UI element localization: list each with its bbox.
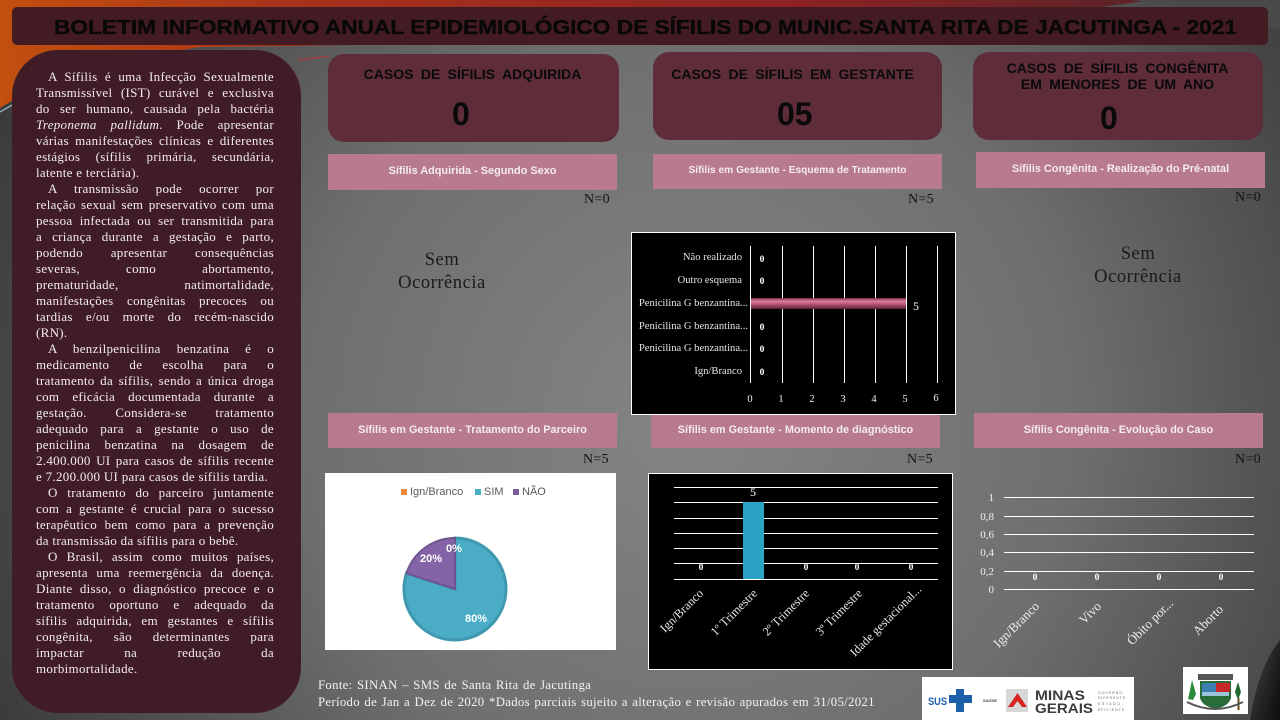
icon: municipal coat of arms: [1183, 667, 1248, 714]
line chart: evolução do caso: 0: [1219, 573, 1224, 583]
text block: syphilis description: O Brasil, assim como muitos países,: [48, 549, 274, 564]
column chart: momento de diagnóstico: 0: [699, 563, 704, 573]
sample size label: N=0: [1235, 190, 1261, 205]
sample size label: N=5: [583, 452, 609, 467]
bar chart: esquema de tratamento: 6: [933, 393, 939, 404]
bar chart: esquema de tratamento: 0: [760, 368, 765, 378]
title: BOLETIM INFORMATIVO ANUAL EPIDEMIOLÓGICO DE SÍFILIS DO MUNIC.SANTA RITA DE JACUTINGA - 2021: [54, 15, 1237, 39]
heading: adquirida segundo sexo: [328, 154, 617, 190]
line chart: evolução do caso: 0,6: [980, 529, 994, 541]
text block: syphilis description: Treponema pallidum. Pode apresentar: [36, 117, 274, 132]
no occurrence note right: Sem: [1121, 244, 1155, 264]
text block: syphilis description: A transmissão pode ocorrer por: [48, 181, 274, 196]
text block: syphilis description: morbimortalidade.: [36, 661, 138, 676]
legend: Ign/Branco: [410, 486, 463, 498]
line chart: evolução do caso: 0: [1033, 573, 1038, 583]
text block: syphilis description: O tratamento do parceiro juntamente: [48, 485, 274, 500]
card: casos de sífilis congênita: EM MENORES DE UM ANO: [1021, 76, 1214, 92]
line chart: evolução do caso: Ign/Branco: [990, 599, 1042, 650]
source note: [318, 678, 875, 709]
text block: syphilis description: tratamento oportuno e adequado da: [36, 597, 274, 612]
pie chart: tratamento do parceiro: 20%: [420, 553, 442, 565]
text block: syphilis description: manifestações congênitas precoces ou: [36, 293, 274, 308]
panel: text about syphilis: [12, 50, 301, 713]
line chart: evolução do caso: 0,4: [980, 547, 994, 559]
line chart: evolução do caso: Aborto: [1189, 602, 1226, 638]
text block: syphilis description: A benzilpenicilina benzatina é o: [48, 341, 274, 356]
bar chart: esquema de tratamento: 4: [871, 394, 877, 405]
column chart: momento de diagnóstico: 0: [909, 563, 914, 573]
column chart: momento de diagnóstico: 2º Trimestre: [760, 586, 813, 639]
card: casos de sífilis congênita: CASOS DE SÍFILIS CONGÊNITA: [1007, 60, 1228, 76]
line chart: evolução do caso: 0: [1095, 573, 1100, 583]
text block: syphilis description: A Sífilis é uma Infecção Sexualmente: [48, 69, 274, 84]
column chart: momento de diagnóstico: Idade gestacional...: [847, 582, 924, 659]
text block: syphilis description: pessoa infectada ou ser transmitida para: [36, 213, 274, 228]
bar chart: esquema de tratamento: 1: [778, 394, 784, 405]
bar chart: esquema de tratamento: 0: [760, 323, 765, 333]
column chart: momento de diagnóstico: [648, 473, 953, 670]
line chart: evolução do caso: 1: [988, 492, 994, 504]
heading: esquema de tratamento: [653, 154, 942, 189]
text block: syphilis description: com a gestante é crucial para o sucesso: [36, 501, 274, 516]
logo: SUS and Minas Gerais: GERAIS: [1035, 700, 1093, 716]
card: casos de sífilis adquirida: 0: [452, 96, 470, 132]
line chart: evolução do caso: Óbito por...: [1124, 596, 1176, 648]
legend: NÃO: [522, 485, 546, 498]
text block: syphilis description: severas, como abortamento,: [36, 261, 274, 276]
line chart: evolução do caso: [980, 492, 1254, 650]
slice: NÃO 20%: [406, 538, 455, 589]
text block: syphilis description: (RN).: [36, 325, 67, 340]
heading: esquema de tratamento: Sífilis em Gestante - Esquema de Tratamento: [689, 165, 906, 176]
sample size label: N=5: [907, 452, 933, 467]
text block: syphilis description: [36, 69, 274, 676]
bar chart: esquema de tratamento: [631, 232, 956, 415]
text block: syphilis description: penicilina benzatina na dosagem de: [36, 437, 274, 452]
column chart: momento de diagnóstico: 0: [855, 563, 860, 573]
legend: SIM: [484, 486, 504, 498]
logo: SUS and Minas Gerais: MINAS: [1035, 687, 1085, 703]
text block: syphilis description: prematuridade, natimortalidade,: [36, 277, 274, 292]
text block: syphilis description: tratamento da sífilis, sendo a única droga: [36, 373, 274, 388]
slice: SIM 80%: [404, 538, 506, 640]
logo: SUS and Minas Gerais: SUS: [928, 696, 947, 708]
sample size label: N=5: [908, 192, 934, 207]
text block: syphilis description: medicamento de escolha para o: [36, 357, 274, 372]
text block: syphilis description: relação sexual sem preservativo com uma: [36, 197, 274, 212]
text block: syphilis description: estágios (sífilis primária, secundária,: [36, 149, 274, 164]
heading: adquirida segundo sexo: Sífilis Adquirida - Segundo Sexo: [389, 165, 556, 177]
bar chart: esquema de tratamento: Penicilina G benzantina...: [639, 343, 748, 354]
column chart: momento de diagnóstico: Ign/Branco: [657, 586, 706, 635]
text block: syphilis description: congênita, são determinantes para: [36, 629, 274, 644]
logo: SUS and Minas Gerais: [922, 677, 1134, 720]
bar: Penicilina 5: [751, 298, 906, 309]
line chart: evolução do caso: Vivo: [1076, 599, 1104, 627]
bar chart: esquema de tratamento: Penicilina G benzantina...: [639, 298, 748, 309]
text block: syphilis description: sífilis adquirida, em gestantes e sífilis: [36, 613, 274, 628]
source note: Fonte: SINAN – SMS de Santa Rita de Jacutinga: [318, 678, 591, 692]
bar chart: esquema de tratamento: 0: [760, 345, 765, 355]
column chart: momento de diagnóstico: 1º Trimestre: [708, 586, 761, 639]
text block: syphilis description: várias manifestações clínicas e diferentes: [36, 133, 274, 148]
pie chart: tratamento do parceiro: [325, 473, 616, 650]
text block: syphilis description: Transmissível (IST) curável e exclusiva: [36, 85, 274, 100]
text block: syphilis description: do ser humano, causada pela bactéria: [36, 101, 274, 116]
pie chart: tratamento do parceiro: 80%: [465, 613, 487, 625]
bar chart: esquema de tratamento: 5: [913, 299, 919, 313]
text block: syphilis description: com eficácia documentada durante a: [36, 389, 274, 404]
bar chart: esquema de tratamento: Penicilina G benzantina...: [639, 321, 748, 332]
heading: tratamento do parceiro: [328, 413, 617, 448]
card: casos de sífilis adquirida: CASOS DE SÍFILIS ADQUIRIDA: [364, 66, 581, 82]
bar chart: esquema de tratamento: 0: [747, 394, 753, 405]
source note: Período de Jan a Dez de 2020 *Dados parciais sujeito a alteração e revisão apurados em 31/05/2021: [318, 695, 875, 709]
line chart: evolução do caso: 0,8: [980, 511, 994, 523]
bar chart: esquema de tratamento: 0: [760, 255, 765, 265]
line chart: evolução do caso: 0: [1157, 573, 1162, 583]
bar chart: esquema de tratamento: 0: [760, 277, 765, 287]
text block: syphilis description: 2.400.000 UI para casos de sífilis recente: [36, 453, 274, 468]
logo: SUS and Minas Gerais: SAÚDE: [983, 698, 997, 703]
text block: syphilis description: terapêutico bem como para a prevenção: [36, 517, 274, 532]
heading: momento de diagnóstico: [651, 413, 940, 448]
line chart: evolução do caso: 0,2: [980, 566, 994, 578]
logo: SUS and Minas Gerais: GOVERNO: [1098, 691, 1122, 695]
bar: 1º Trimestre: [743, 502, 764, 579]
text block: syphilis description: a criança durante a gestação e parto,: [36, 229, 274, 244]
heading: tratamento do parceiro: Sífilis em Gestante - Tratamento do Parceiro: [358, 424, 587, 436]
no occurrence note left: [398, 250, 486, 293]
text block: syphilis description: Diante disso, o diagnóstico precoce e o: [36, 581, 274, 596]
line chart: evolução do caso: 0: [988, 584, 994, 596]
text block: syphilis description: tardias e/ou morte do recém-nascido: [36, 309, 274, 324]
heading: evolução do caso: [974, 413, 1263, 448]
text block: syphilis description: adequado para a gestante o uso de: [36, 421, 274, 436]
card: casos de sífilis em gestante: CASOS DE SÍFILIS EM GESTANTE: [671, 66, 914, 82]
bar chart: esquema de tratamento: 2: [809, 394, 815, 405]
card: casos de sífilis congênita: [973, 52, 1263, 140]
no occurrence note right: [1094, 244, 1182, 287]
card: casos de sífilis em gestante: 05: [777, 96, 813, 132]
column chart: momento de diagnóstico: 5: [750, 485, 756, 499]
pie chart: tratamento do parceiro: 0%: [446, 543, 462, 555]
text block: syphilis description: latente e terciária).: [36, 165, 139, 180]
logo: SUS and Minas Gerais: DIFERENTE.: [1098, 696, 1127, 700]
card: casos de sífilis congênita: 0: [1100, 100, 1118, 136]
bar chart: esquema de tratamento: 5: [902, 394, 908, 405]
text block: syphilis description: e 7.200.000 UI para casos de sífilis tardia.: [36, 469, 268, 484]
sample size label: N=0: [584, 192, 610, 207]
legend: [401, 485, 546, 498]
bar chart: esquema de tratamento: Não realizado: [683, 252, 742, 263]
card: casos de sífilis em gestante: [653, 52, 942, 140]
column chart: momento de diagnóstico: 0: [804, 563, 809, 573]
text block: syphilis description: apresenta uma reemergência da doença.: [36, 565, 274, 580]
text block: syphilis description: podendo apresentar consequências: [36, 245, 274, 260]
text block: syphilis description: da transmissão da sífilis para o bebê.: [36, 533, 238, 548]
no occurrence note left: Sem: [425, 250, 459, 270]
logo: SUS and Minas Gerais: EFICIENTE.: [1098, 708, 1126, 712]
heading: momento de diagnóstico: Sífilis em Gestante - Momento de diagnóstico: [678, 424, 913, 436]
no occurrence note left: Ocorrência: [398, 273, 486, 293]
text block: syphilis description: impactar na redução da: [36, 645, 274, 660]
heading: realização do pré-natal: Sífilis Congênita - Realização do Pré-natal: [1012, 163, 1229, 175]
column chart: momento de diagnóstico: 3º Trimestre: [813, 586, 866, 639]
text block: syphilis description: gestação. Considera-se tratamento: [36, 405, 274, 420]
bar chart: esquema de tratamento: Ign/Branco: [694, 366, 742, 377]
logo: SUS and Minas Gerais: ESTADO: [1098, 702, 1120, 706]
sample size label: N=0: [1235, 452, 1261, 467]
title bar: [12, 7, 1268, 45]
heading: evolução do caso: Sífilis Congênita - Evolução do Caso: [1024, 424, 1213, 436]
card: casos de sífilis adquirida: [328, 54, 619, 142]
no occurrence note right: Ocorrência: [1094, 267, 1182, 287]
bar chart: esquema de tratamento: Outro esquema: [678, 275, 742, 286]
bar chart: esquema de tratamento: 3: [840, 394, 846, 405]
heading: realização do pré-natal: [976, 152, 1265, 188]
